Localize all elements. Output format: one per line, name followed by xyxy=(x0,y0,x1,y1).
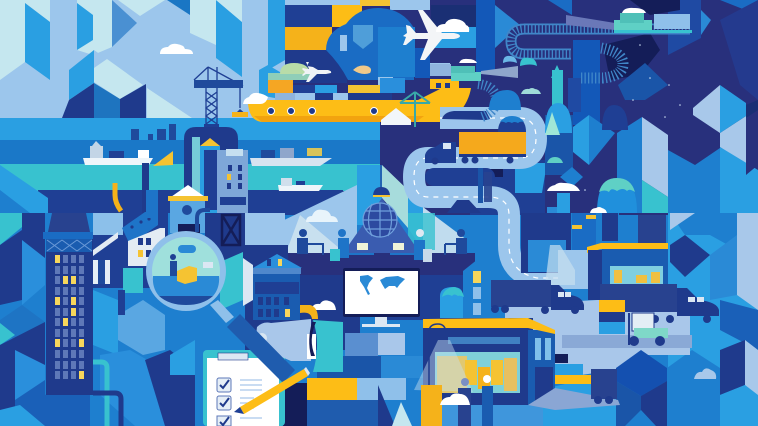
icon: grey ship centre xyxy=(250,148,332,166)
panel: mid-right city and street lamp xyxy=(521,213,666,285)
icon: small white ship right xyxy=(278,178,323,191)
icon: stack of containers xyxy=(599,300,625,334)
icon: airplane large xyxy=(403,10,460,60)
icon: desktop monitor with world map xyxy=(343,268,420,327)
icon: distant skyline xyxy=(131,124,176,140)
panel: mid-left houses xyxy=(93,185,245,315)
panel: lower-mid towers xyxy=(547,183,580,232)
panel: sea bands xyxy=(0,118,380,215)
panel: right-side top geometry xyxy=(476,0,758,125)
panel: central mid dark block xyxy=(220,245,475,350)
panel: right hex field lower xyxy=(667,213,758,426)
icon: globe xyxy=(363,203,397,237)
icon: winding road xyxy=(414,118,590,278)
icon: small plane on stack xyxy=(302,62,331,82)
icon: cloud by airplane xyxy=(436,19,469,32)
panel: light plaza xyxy=(505,295,692,426)
panel: central triangles behind office xyxy=(245,165,467,255)
icon: clipboard with checklist xyxy=(203,350,285,426)
icon: small cloud on upper right xyxy=(590,207,607,213)
icon: clouds by office xyxy=(306,210,338,310)
icon: cloud at ship bow xyxy=(243,93,268,104)
panel: yellow cargo ship xyxy=(248,63,471,122)
panel: top-left pale hex sky xyxy=(0,0,285,118)
icon: mint train upper xyxy=(566,8,692,33)
panel: containers below monitor xyxy=(283,333,423,426)
panel: dark blocks under road xyxy=(470,115,583,215)
icon: cloud left xyxy=(160,44,193,54)
panel: railway tracks xyxy=(478,29,690,117)
panel: left tall tower xyxy=(43,213,95,395)
icon: building with blue facade xyxy=(253,254,302,320)
icon: harbour crane xyxy=(194,67,248,130)
panel: warehouse upper right xyxy=(587,243,668,300)
icon: magnifying glass xyxy=(146,231,226,311)
panel: warehouse forecourt xyxy=(423,388,620,426)
panel: top-centre container stack and executive xyxy=(285,0,476,85)
panel: right hex cluster xyxy=(573,85,758,213)
icon: tower windows xyxy=(55,255,84,379)
panel: left hex field xyxy=(0,213,285,426)
icon: night stars xyxy=(584,44,681,191)
icon: forklift xyxy=(628,313,668,346)
icon: navy truck upper right xyxy=(600,284,719,323)
panel: centre-right hills and trees xyxy=(489,56,581,163)
icon: yellow container truck xyxy=(425,132,526,164)
icon: mint train lower xyxy=(430,59,518,81)
icon: workers with clipboard and boxes xyxy=(421,375,493,426)
icon: lattice pylon xyxy=(222,215,240,245)
icon: white hill by ship xyxy=(381,108,411,125)
icon: office workers at desks xyxy=(297,229,467,262)
panel: inner road block xyxy=(425,116,526,213)
panel: dark hex near plaza xyxy=(616,350,667,426)
panel: centre bottom buildings xyxy=(380,259,491,426)
icon: small teal crane on ship xyxy=(400,92,430,127)
panel: central pipes and buildings xyxy=(115,127,248,215)
icon: small navy truck on road xyxy=(442,111,490,120)
icon: hanging lamp xyxy=(373,165,390,197)
panel: lower-centre warehouse xyxy=(414,318,555,426)
icon: pencil xyxy=(234,367,310,414)
icon: loading truck xyxy=(555,354,617,404)
icon: white ship left xyxy=(83,141,153,165)
icon: hand holding magnifier xyxy=(210,300,343,383)
icon: navy truck centre xyxy=(491,280,584,314)
